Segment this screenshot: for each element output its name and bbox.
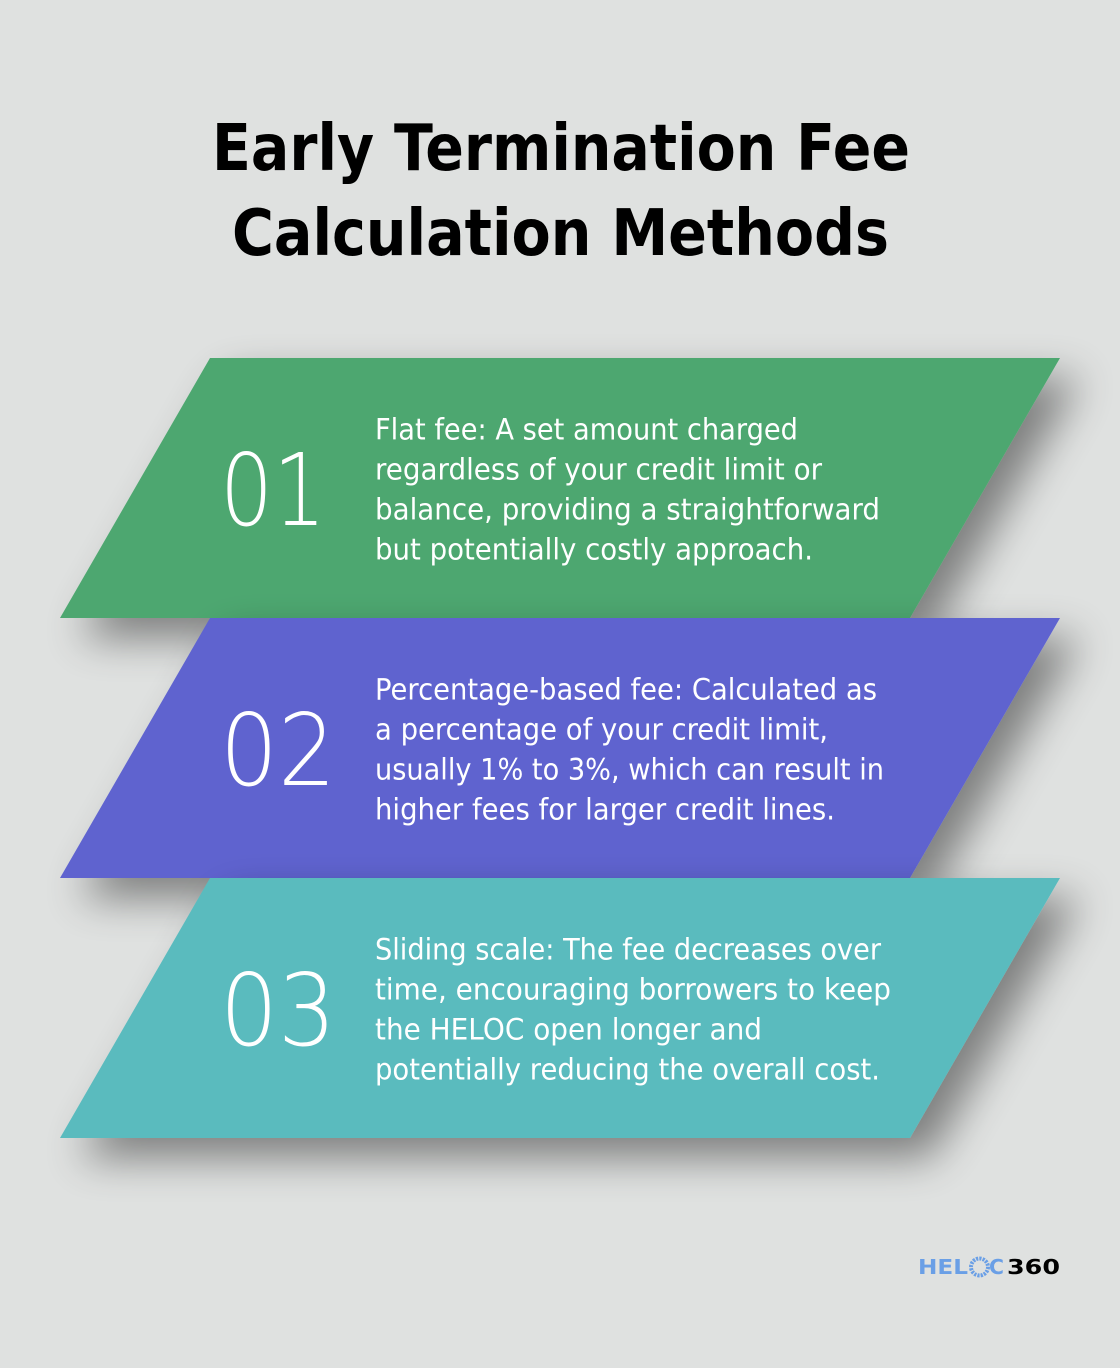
number 02: 02: [220, 692, 336, 809]
title: [212, 112, 910, 271]
text block: percentage-based fee: usually 1% to 3%, which can result in: [375, 752, 884, 786]
title: Calculation Methods: [232, 197, 889, 271]
text block: flat fee: regardless of your credit limit or: [375, 452, 823, 486]
text block: flat fee: [375, 412, 880, 566]
panel: step 02 percentage-based fee: [60, 618, 1060, 878]
parallelogram: green: [60, 358, 1060, 618]
parallelogram: teal: [60, 878, 1060, 1138]
text block: flat fee: but potentially costly approach.: [375, 532, 813, 566]
icon: swirl ring: [971, 1258, 988, 1276]
text block: sliding scale: the HELOC open longer and: [375, 1012, 762, 1046]
number 01: 01: [220, 432, 326, 549]
text block: percentage-based fee: [375, 672, 884, 826]
panel: step 03 sliding scale: [60, 878, 1060, 1138]
parallelogram: indigo: [60, 618, 1060, 878]
number 03: 03: [220, 952, 336, 1069]
text block: sliding scale: time, encouraging borrowers to keep: [375, 972, 891, 1006]
title: Early Termination Fee: [212, 112, 910, 186]
text block: sliding scale: potentially reducing the overall cost.: [375, 1052, 880, 1086]
logo: HELOC360: C: [989, 1255, 1004, 1279]
text block: percentage-based fee: a percentage of your credit limit,: [375, 712, 828, 746]
logo: HELOC360: [918, 1255, 1060, 1279]
text block: percentage-based fee: higher fees for larger credit lines.: [375, 792, 835, 826]
panel: step 01 flat fee: [60, 358, 1060, 618]
logo: HELOC360: HEL: [918, 1255, 968, 1279]
text block: percentage-based fee: Percentage-based fee: Calculated as: [375, 672, 877, 706]
logo: HELOC360: 360: [1007, 1255, 1060, 1279]
text block: flat fee: Flat fee: A set amount charged: [375, 412, 798, 446]
text block: sliding scale: [375, 932, 891, 1086]
text block: flat fee: balance, providing a straightforward: [375, 492, 880, 526]
text block: sliding scale: Sliding scale: The fee decreases over: [375, 932, 882, 966]
